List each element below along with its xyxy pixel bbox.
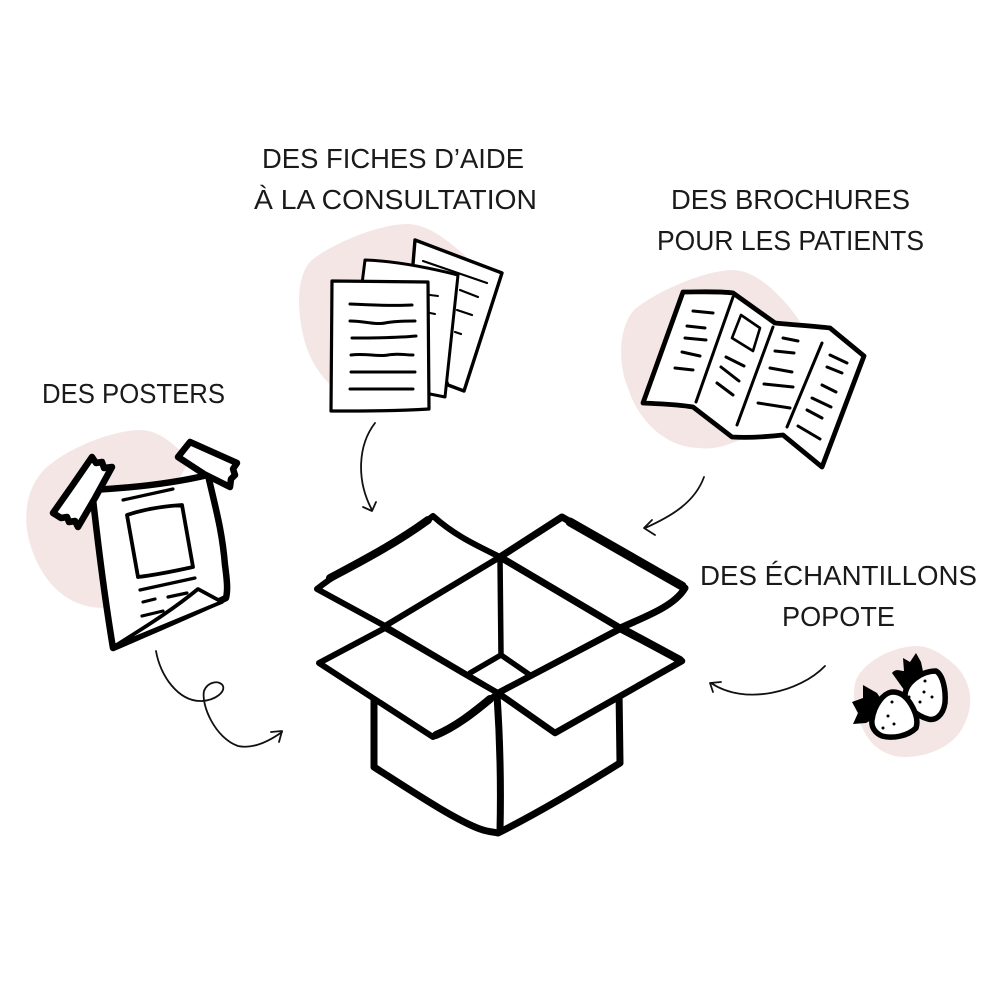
label: des fiches d'aide: À LA CONSULTATION — [254, 184, 537, 215]
back sheet — [410, 240, 502, 391]
arrow: brochure to box — [644, 477, 704, 535]
box body — [374, 690, 620, 833]
sheets pink blob — [299, 224, 470, 386]
box back right flap heavy edge — [570, 522, 682, 586]
label: des échantillons: DES ÉCHANTILLONS — [700, 560, 977, 591]
poster pink blob — [26, 430, 190, 608]
strawberries pink blob — [854, 646, 970, 757]
poster folded corner — [115, 589, 222, 646]
box front left flap heavy edge — [436, 699, 490, 735]
icon: open cardboard box — [317, 516, 685, 833]
icon: strawberries — [852, 646, 970, 757]
front sheet lines — [350, 304, 416, 389]
poster picture — [127, 505, 193, 577]
poster tape left — [53, 457, 112, 527]
arrow: sheets to box — [361, 423, 376, 511]
box front left flap — [319, 628, 498, 737]
poster text lines — [123, 489, 195, 616]
arrow: poster to box — [156, 651, 282, 747]
poster tape right — [178, 442, 237, 487]
label: des posters: DES POSTERS — [42, 378, 225, 409]
strawberry seeds — [882, 680, 934, 730]
brochure folds — [696, 297, 822, 427]
icon: poster — [26, 430, 237, 648]
brochure text lines — [675, 311, 847, 439]
middle sheet — [360, 260, 458, 397]
arrow: samples to box — [710, 666, 825, 695]
brochure outline — [643, 292, 864, 467]
box inner edges — [470, 557, 530, 675]
icon: brochure — [621, 270, 864, 467]
label: des fiches d'aide — [254, 143, 537, 215]
box front right flap — [498, 629, 682, 733]
label: des fiches d'aide: DES FICHES D’AIDE — [262, 143, 524, 174]
front sheet — [331, 281, 429, 411]
right strawberry — [905, 671, 945, 719]
label: des échantillons — [700, 560, 977, 632]
back sheet lines — [423, 261, 487, 334]
brochure picture — [732, 315, 760, 351]
label: des brochures: POUR LES PATIENTS — [657, 225, 924, 256]
box front edge — [497, 695, 500, 831]
box back left flap — [317, 516, 500, 626]
box front right flap heavy edge — [628, 632, 680, 660]
label: des échantillons: POPOTE — [782, 601, 895, 632]
label: des brochures: DES BROCHURES — [671, 184, 910, 215]
middle sheet lines — [430, 295, 438, 314]
icon: consultation sheets — [299, 224, 502, 411]
poster sheet — [92, 475, 227, 648]
brochure pink blob — [621, 270, 802, 448]
right strawberry leaves — [892, 653, 924, 694]
box opening — [385, 557, 620, 693]
left strawberry leaves — [852, 685, 885, 724]
label: des brochures — [657, 184, 924, 256]
left strawberry — [872, 692, 917, 737]
box back left flap heavy edge — [330, 520, 428, 578]
box back right flap — [500, 517, 685, 628]
